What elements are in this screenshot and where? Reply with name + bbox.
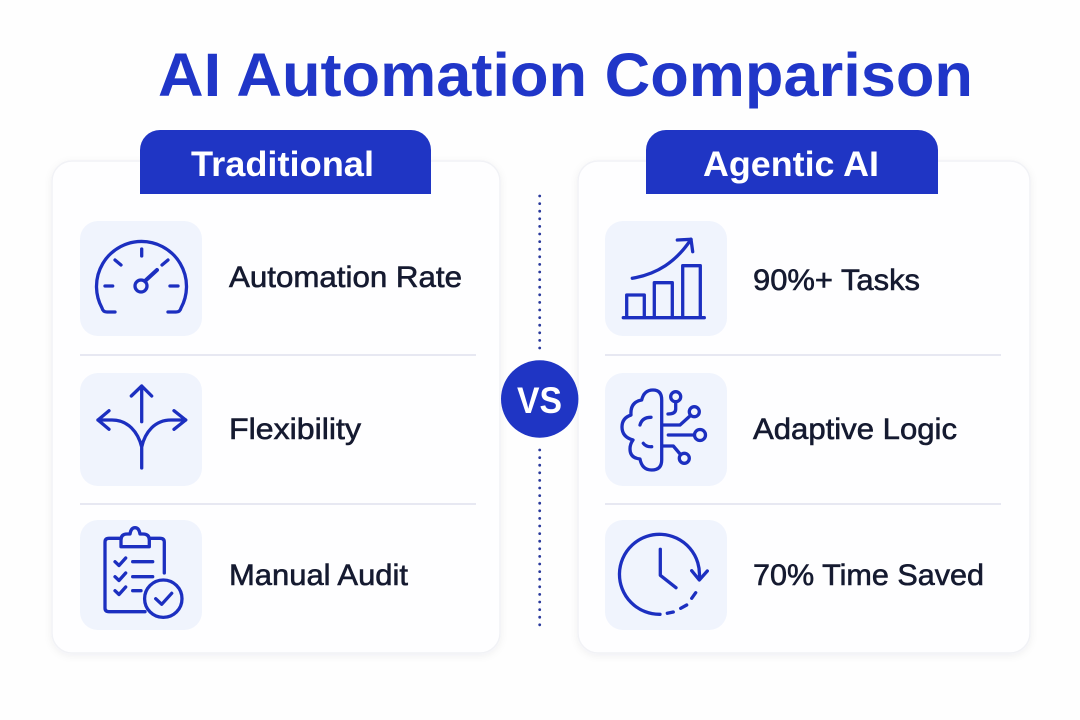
tab: traditional	[140, 130, 431, 194]
icon: speedometer	[97, 241, 186, 312]
icon: brain circuit	[622, 390, 706, 470]
row: 70% time saved	[605, 520, 984, 630]
dotted divider	[538, 196, 541, 625]
VS badge	[501, 360, 578, 438]
tab: agentic AI: Agentic AI	[703, 145, 879, 184]
panel: agentic AI	[578, 130, 1030, 653]
label: Adaptive Logic	[753, 413, 957, 446]
icon: branching arrows	[98, 386, 186, 468]
label: 70% Time Saved	[753, 559, 984, 592]
panel: traditional	[52, 130, 500, 653]
row: adaptive logic	[605, 373, 957, 486]
icon: clipboard check	[105, 528, 182, 617]
row: manual audit	[80, 520, 409, 630]
tab: traditional: Traditional	[191, 145, 374, 184]
icon: clock with arrow	[619, 534, 707, 614]
tab: agentic AI	[646, 130, 938, 194]
label: Manual Audit	[229, 559, 409, 592]
label: 90%+ Tasks	[753, 264, 920, 297]
row: automation rate	[80, 221, 462, 336]
label: Automation Rate	[229, 261, 462, 294]
row: 90%+ tasks	[605, 221, 920, 336]
VS badge: VS	[517, 380, 562, 421]
title: AI Automation Comparison	[158, 41, 973, 109]
row: flexibility	[80, 373, 361, 486]
label: Flexibility	[229, 413, 361, 446]
icon: growth chart	[623, 239, 704, 318]
